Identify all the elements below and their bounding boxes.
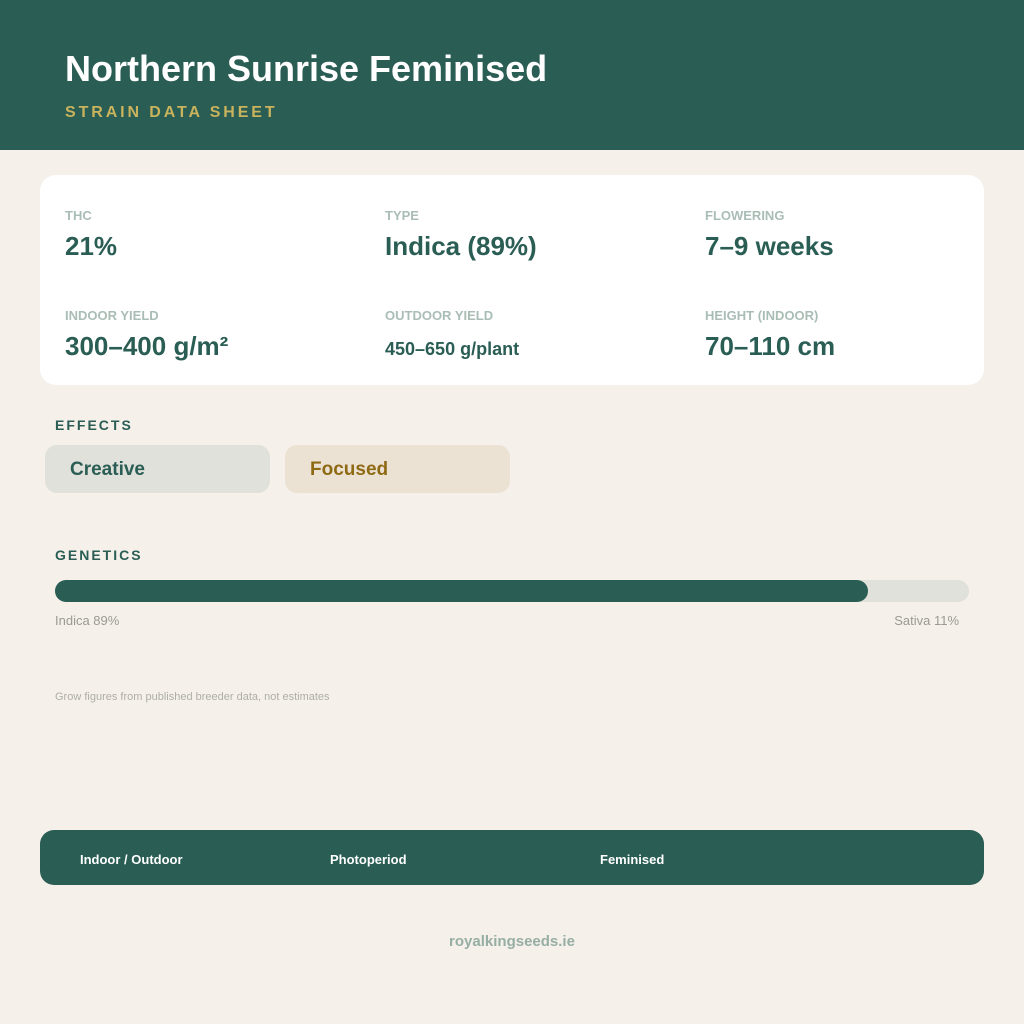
- header band: [0, 0, 1024, 150]
- stat: THC: 21%: [65, 231, 117, 261]
- heading: effects: EFFECTS: [55, 417, 133, 433]
- heading: genetics: GENETICS: [55, 547, 143, 563]
- stat: flowering: FLOWERING: [705, 208, 784, 223]
- tag: creative: [45, 445, 270, 493]
- tag: creative: Creative: [70, 459, 145, 480]
- note: Grow figures from published breeder data, not estimates: [55, 691, 330, 703]
- footer url: royalkingseeds.ie: [449, 933, 575, 950]
- stat: height: 70–110 cm: [705, 331, 835, 361]
- stat: indoor yield: 300–400 g/m²: [65, 331, 228, 361]
- panel: stats card: [40, 175, 984, 385]
- tag: focused: [285, 445, 510, 493]
- stat: flowering: 7–9 weeks: [705, 231, 834, 261]
- feature: grow setting: Indoor / Outdoor: [80, 852, 183, 867]
- stat: THC: [65, 208, 117, 261]
- label: indica: Indica 89%: [55, 613, 119, 628]
- stat: indoor yield: [65, 308, 228, 361]
- feature: photoperiod: Photoperiod: [330, 852, 407, 867]
- stat: outdoor yield: OUTDOOR YIELD: [385, 308, 493, 323]
- feature: feminised: Feminised: [600, 852, 664, 867]
- stat: THC: THC: [65, 208, 92, 223]
- stat: type: Indica (89%): [385, 231, 537, 261]
- label: sativa: Sativa 11%: [894, 613, 959, 628]
- chart: genetics bar: [55, 580, 969, 602]
- title: Northern Sunrise Feminised: [65, 48, 547, 89]
- stat: type: TYPE: [385, 208, 419, 223]
- stat: height: [705, 308, 835, 361]
- stat: outdoor yield: 450–650 g/plant: [385, 339, 519, 359]
- stat: type: [385, 208, 537, 261]
- tag: focused: Focused: [310, 459, 388, 480]
- indica share: [55, 580, 868, 602]
- subtitle: STRAIN DATA SHEET: [65, 104, 278, 121]
- stat: outdoor yield: [385, 308, 519, 359]
- panel: feature bar: [40, 830, 984, 885]
- stat: height: HEIGHT (INDOOR): [705, 308, 818, 323]
- stat: indoor yield: INDOOR YIELD: [65, 308, 159, 323]
- stat: flowering: [705, 208, 834, 261]
